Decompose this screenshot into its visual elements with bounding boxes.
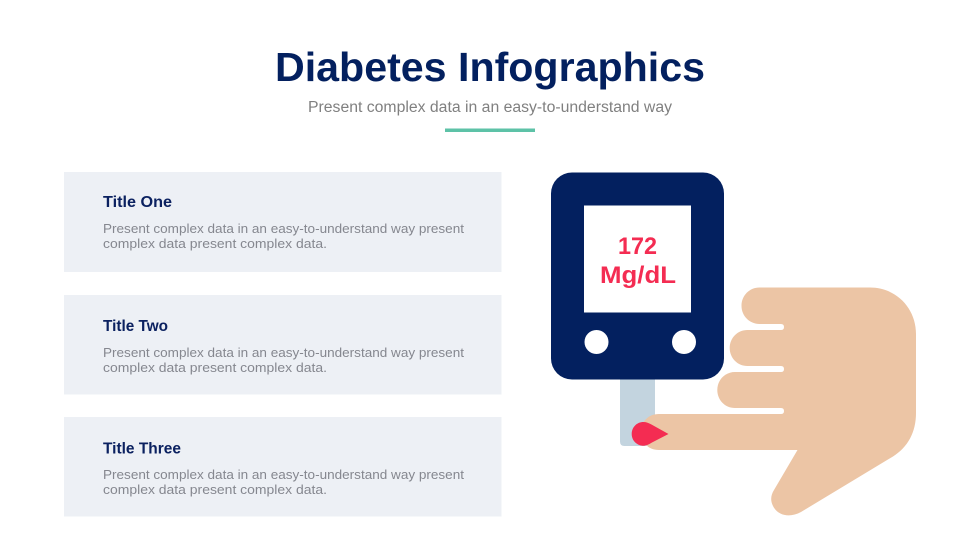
heading: title one: Title One: [103, 194, 172, 211]
hand: [641, 288, 916, 515]
text block: title two: complex data present complex data.: [103, 361, 327, 375]
heading: title three: Title Three: [103, 440, 181, 458]
text block: title three: complex data present complex data.: [103, 483, 327, 497]
text block: title three: Present complex data in an easy-to-understand way present: [103, 468, 465, 482]
reading: 172: [618, 233, 657, 260]
reading: Mg/dL: [600, 262, 676, 289]
text block: title one: [103, 222, 465, 251]
glucose meter: [551, 172, 724, 380]
text block: title three: [103, 468, 465, 497]
meter buttons: [584, 330, 696, 354]
test strip: [620, 378, 655, 446]
meter screen: [584, 206, 691, 312]
panel: title two: [64, 295, 502, 394]
blood drop: [632, 422, 668, 446]
accent underline: [445, 128, 535, 132]
text block: title one: Present complex data in an easy-to-understand way present: [103, 222, 465, 236]
heading: title two: Title Two: [103, 318, 168, 335]
text block: title one: complex data present complex data.: [103, 237, 327, 251]
title: Diabetes Infographics: [275, 44, 705, 90]
panel: title three: [64, 417, 502, 516]
text block: title two: [103, 346, 465, 375]
text block: title two: Present complex data in an easy-to-understand way present: [103, 346, 465, 360]
subtitle: Present complex data in an easy-to-understand way: [308, 99, 672, 116]
reading: [600, 233, 676, 289]
illustration: glucose meter and hand: [551, 172, 916, 515]
panel: title one: [64, 172, 502, 272]
